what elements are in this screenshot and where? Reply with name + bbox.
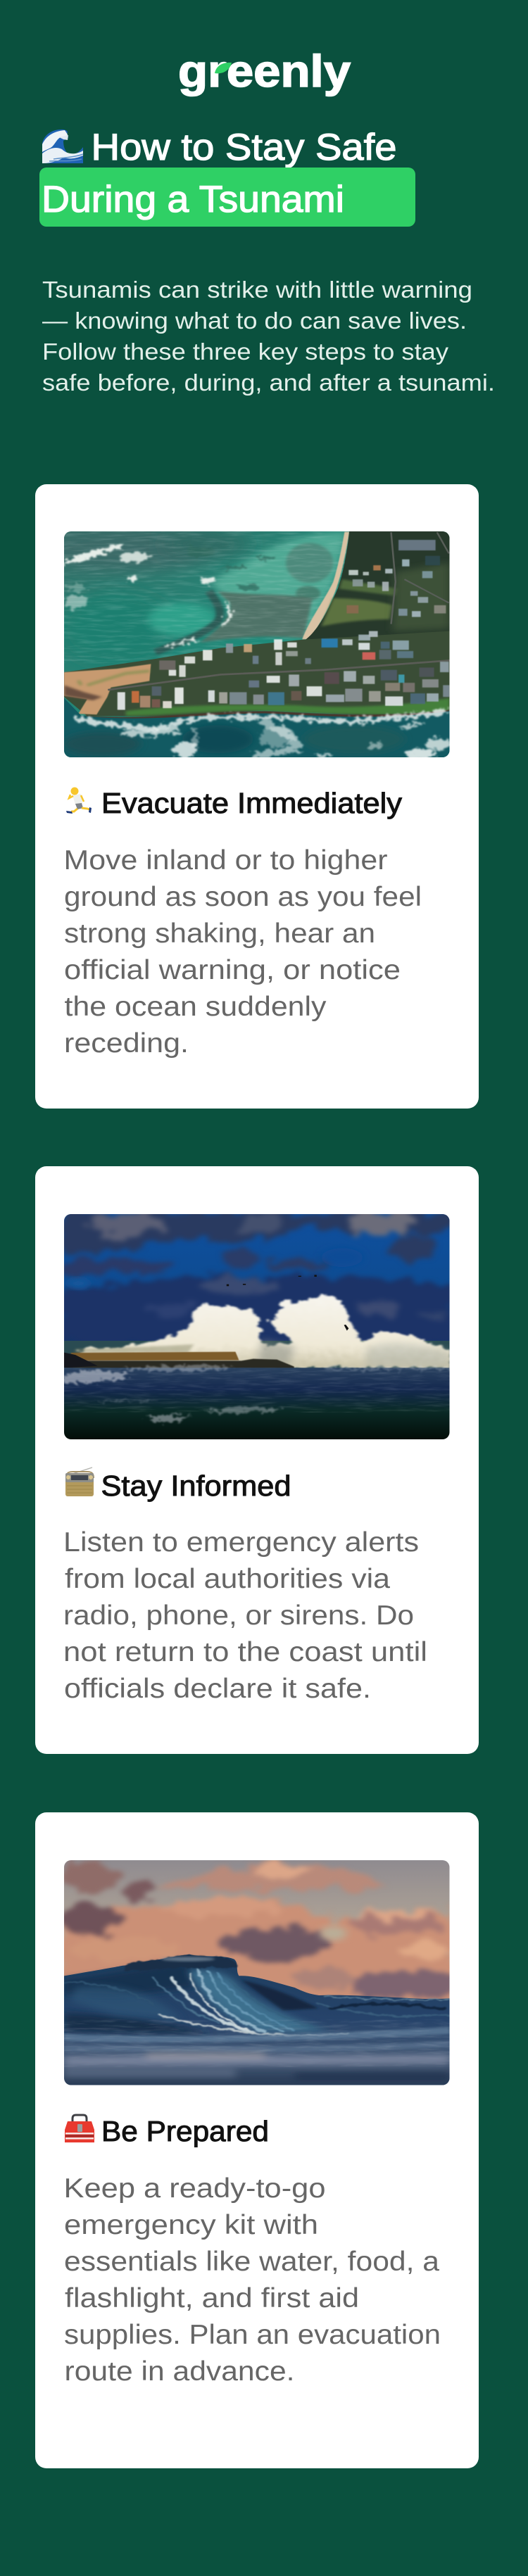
icon: leaf on the r bbox=[215, 63, 232, 73]
crest spray bbox=[124, 1955, 237, 1971]
title: How to Stay Safe During a Tsunami: How to Stay Safe bbox=[92, 127, 397, 168]
body text: ground as soon as you feel bbox=[64, 882, 422, 912]
intro paragraph: safe before, during, and after a tsunami. bbox=[42, 370, 495, 396]
heading: Evacuate Immediately bbox=[101, 787, 403, 819]
body text: receding. bbox=[64, 1028, 189, 1059]
lower ocean bbox=[64, 698, 449, 757]
body text bbox=[63, 2173, 441, 2387]
panel: Evacuate Immediately bbox=[35, 484, 479, 1109]
intro paragraph: Follow these three key steps to stay bbox=[42, 339, 449, 365]
spray bbox=[78, 1295, 449, 1368]
body text bbox=[63, 1527, 427, 1704]
wave body bbox=[64, 1955, 449, 2085]
title: How to Stay Safe During a Tsunami: During a Tsunami bbox=[42, 179, 344, 220]
photo: ocean wave at sunset bbox=[61, 1860, 461, 2085]
icon: runner emoji bbox=[66, 787, 92, 814]
panel: Stay Informed bbox=[35, 1166, 479, 1754]
photo: aerial coastline bbox=[37, 528, 451, 758]
icon: wave emoji bbox=[42, 130, 83, 163]
body text: officials declare it safe. bbox=[64, 1674, 371, 1704]
body text: emergency kit with bbox=[64, 2210, 318, 2240]
cliff bbox=[64, 664, 151, 714]
body text: flashlight, and first aid bbox=[65, 2283, 359, 2313]
land top right bbox=[305, 531, 449, 640]
body text: official warning, or notice bbox=[64, 955, 401, 985]
photo: waves crashing on pier bbox=[61, 1212, 455, 1439]
body text: from local authorities via bbox=[65, 1564, 390, 1594]
birds bbox=[227, 1275, 348, 1331]
houses bbox=[118, 540, 450, 710]
foreground bands bbox=[64, 2027, 449, 2052]
body text: Listen to emergency alerts bbox=[63, 1527, 419, 1558]
panel: Be Prepared bbox=[35, 1812, 479, 2468]
neighbourhood band bbox=[64, 631, 449, 716]
body text bbox=[63, 845, 422, 1059]
highlight bar bbox=[39, 168, 415, 227]
title: How to Stay Safe During a Tsunami bbox=[39, 127, 415, 227]
logo: greenly: greenly bbox=[178, 46, 351, 96]
pier bbox=[71, 1352, 239, 1360]
body text: essentials like water, food, a bbox=[64, 2247, 439, 2277]
body text: strong shaking, hear an bbox=[64, 918, 375, 949]
body text: radio, phone, or sirens. Do bbox=[63, 1600, 414, 1631]
sea bbox=[64, 1368, 449, 1439]
icon: toolbox emoji bbox=[65, 2115, 94, 2142]
road bbox=[108, 660, 450, 690]
body text: not return to the coast until bbox=[63, 1637, 427, 1667]
body text: Move inland or to higher bbox=[63, 845, 388, 876]
beach bbox=[302, 532, 349, 639]
intro paragraph bbox=[42, 277, 495, 396]
icon: radio emoji bbox=[65, 1467, 94, 1496]
body text: the ocean suddenly bbox=[65, 992, 327, 1022]
coastal green bbox=[126, 698, 449, 716]
heading: Be Prepared bbox=[101, 2115, 269, 2147]
intro paragraph: Tsunamis can strike with little warning bbox=[42, 277, 472, 303]
body text: supplies. Plan an evacuation bbox=[64, 2320, 441, 2350]
heading: Stay Informed bbox=[101, 1470, 291, 1502]
body text: route in advance. bbox=[65, 2356, 294, 2387]
body text: Keep a ready-to-go bbox=[63, 2173, 325, 2204]
wave streaks bbox=[64, 1969, 449, 2035]
intro paragraph: — knowing what to do can save lives. bbox=[42, 308, 467, 334]
